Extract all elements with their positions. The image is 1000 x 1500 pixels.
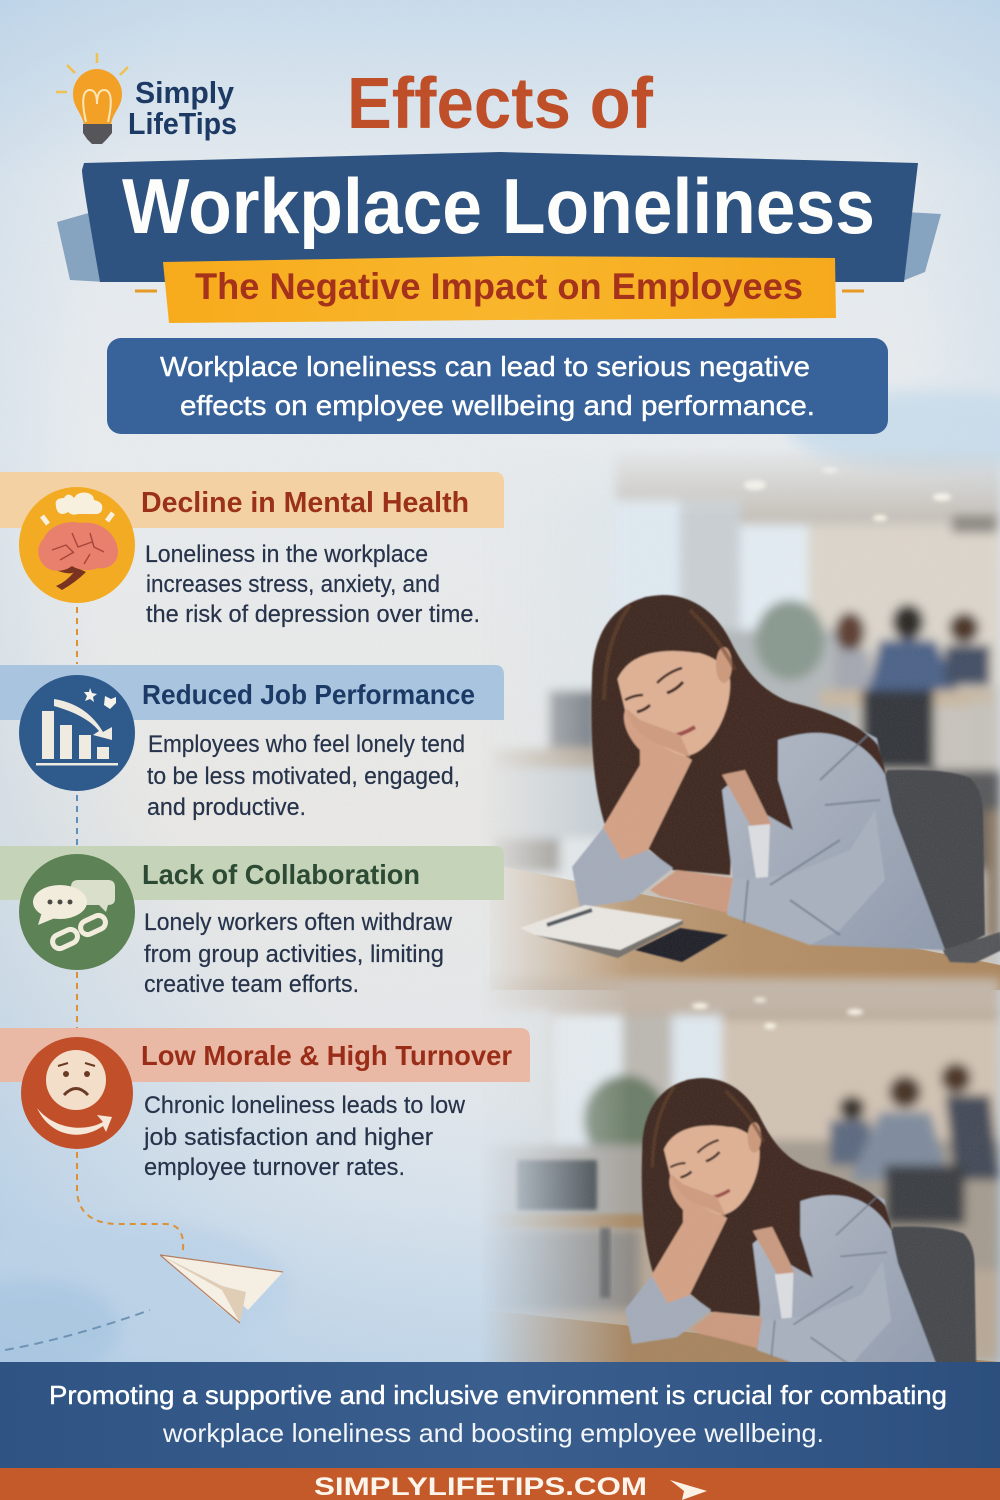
icon: small paper plane (670, 1480, 707, 1500)
closing message band: workplace loneliness and boosting employee wellbeing. (162, 1418, 824, 1448)
photo: woman at desk, lower scene (489, 972, 1000, 1362)
heading band: Decline in Mental Health (141, 487, 469, 519)
heading band (0, 846, 504, 900)
closing message band (0, 1362, 1000, 1468)
intro panel: Workplace loneliness can lead to serious negative (160, 351, 810, 382)
panel: reduced job performance (0, 665, 504, 821)
body text: creative team efforts. (144, 971, 359, 998)
body text: and productive. (147, 794, 306, 821)
heading band (0, 472, 504, 528)
body text (143, 1092, 466, 1181)
icon: paper plane (160, 1255, 283, 1323)
panel: lack of collaboration (0, 846, 504, 998)
title banner: Workplace Loneliness: Workplace Loneliness (122, 162, 875, 250)
title banner: Workplace Loneliness (57, 152, 941, 282)
connector: mental health to job performance (76, 607, 78, 664)
body text: employee turnover rates. (144, 1154, 405, 1181)
body text: Employees who feel lonely tend (148, 731, 465, 758)
body text: Chronic loneliness leads to low (144, 1092, 466, 1119)
body text: from group activities, limiting (144, 941, 444, 968)
logo wordmark (128, 75, 237, 141)
figure: woman resting head on hand (572, 595, 1000, 963)
connector: job performance to collaboration (76, 795, 78, 846)
heading band: Reduced Job Performance (142, 679, 475, 710)
title: Effects of: Effects of (347, 64, 654, 144)
body text (147, 731, 465, 821)
connector: collaboration to morale (76, 972, 78, 1028)
photo: woman at desk, upper scene (470, 450, 1000, 990)
heading band (0, 665, 504, 720)
body text: increases stress, anxiety, and (146, 571, 440, 598)
heading band: Lack of Collaboration (142, 859, 420, 890)
icon: sad face with arrow (21, 1037, 133, 1149)
panel: decline in mental health (0, 472, 504, 628)
logo: Simply LifeTips (56, 53, 237, 144)
subtitle ribbon: The Negative Impact on Employees: The Negative Impact on Employees (195, 266, 803, 307)
body text (144, 909, 453, 998)
icon: brain (19, 487, 135, 603)
intro panel (107, 338, 888, 434)
closing message band: Promoting a supportive and inclusive environment is crucial for combating (49, 1380, 947, 1410)
body text: Loneliness in the workplace (145, 541, 428, 568)
logo wordmark: LifeTips (128, 106, 237, 141)
plane trail: dashed line (5, 1310, 150, 1350)
footer band (0, 1468, 1000, 1500)
intro panel: effects on employee wellbeing and performance. (180, 390, 815, 421)
body text: job satisfaction and higher (143, 1124, 433, 1151)
logo wordmark: Simply (135, 75, 235, 110)
notebook and phone on desk (520, 905, 728, 962)
body text (145, 541, 480, 628)
body text: to be less motivated, engaged, (147, 763, 460, 790)
figure: woman resting head on hand (625, 1078, 991, 1391)
icon: falling bar chart (19, 675, 135, 791)
heading band (0, 1028, 530, 1082)
icon: speech bubbles and broken chain (19, 854, 135, 970)
body text: Lonely workers often withdraw (144, 909, 453, 936)
connector: dashed path to paper plane (77, 1152, 183, 1250)
panel: low morale and high turnover (0, 1028, 530, 1181)
icon: light bulb (56, 53, 128, 144)
subtitle ribbon: The Negative Impact on Employees (135, 256, 864, 323)
body text: the risk of depression over time. (146, 601, 480, 628)
heading band: Low Morale & High Turnover (141, 1040, 512, 1071)
